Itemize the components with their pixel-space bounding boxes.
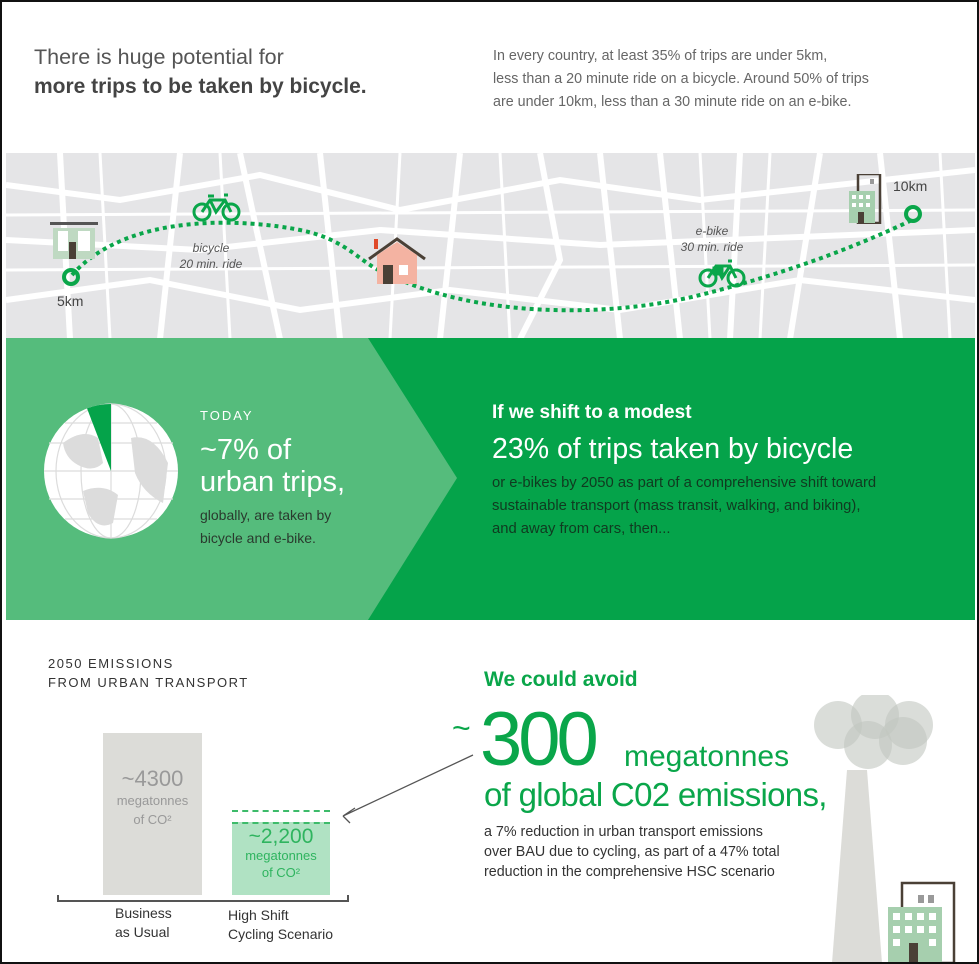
icon: globe with pie wedge — [44, 403, 178, 539]
intro text — [493, 48, 869, 110]
bar: high shift: ~2,200 — [249, 825, 313, 848]
label: business as usual: Business — [115, 905, 172, 921]
label: 5km: 5km — [57, 293, 83, 309]
text: We could avoid — [484, 668, 638, 691]
bar: high shift — [232, 822, 330, 895]
bar: business as usual: of CO² — [133, 812, 172, 827]
green band — [6, 338, 975, 620]
label: bicycle 20 min ride: 20 min. ride — [180, 257, 242, 271]
title: There is huge potential for — [34, 45, 284, 69]
block: we could avoid — [452, 668, 827, 880]
intro text: In every country, at least 35% of trips are under 5km, — [493, 48, 827, 64]
arrow — [342, 754, 474, 824]
route: dotted path — [70, 220, 911, 312]
bar: business as usual: ~4300 — [122, 766, 183, 791]
chart heading — [48, 656, 249, 690]
bar: high shift: of CO² — [262, 865, 300, 880]
block: today: urban trips, — [200, 466, 345, 498]
icon: e-bike — [698, 260, 746, 288]
block: today: TODAY — [200, 408, 254, 423]
bar: business as usual — [103, 733, 202, 895]
block: shift scenario — [492, 402, 876, 537]
icon: office building — [849, 174, 882, 224]
bar: high shift: megatonnes — [245, 848, 317, 863]
block: today: ~7% of — [200, 434, 291, 466]
title: more trips to be taken by bicycle. — [34, 75, 367, 98]
label: 10km: 10km — [893, 178, 927, 194]
icon: factory with smoke — [814, 695, 956, 962]
label: e-bike 30 min ride — [681, 224, 743, 254]
icon: start marker 5km — [62, 268, 80, 286]
text: 300 — [480, 697, 595, 782]
title — [34, 45, 367, 98]
block: today — [200, 408, 345, 546]
text: a 7% reduction in urban transport emissions — [484, 824, 763, 840]
text: over BAU due to cycling, as part of a 47% total — [484, 844, 780, 860]
block: shift scenario: 23% of trips taken by bicycle — [492, 433, 853, 465]
label: bicycle 20 min ride — [180, 241, 242, 271]
label: business as usual — [115, 905, 172, 940]
text: of global C02 emissions, — [484, 776, 827, 813]
text: ~ — [452, 710, 471, 746]
text: megatonnes — [624, 740, 789, 773]
chart heading: 2050 EMISSIONS — [48, 656, 174, 671]
block: shift scenario: or e-bikes by 2050 as part of a comprehensive shift toward — [492, 475, 876, 491]
label: e-bike 30 min ride: e-bike — [696, 224, 728, 238]
label: high shift: High Shift — [228, 907, 289, 923]
map panel — [6, 153, 975, 338]
icon: bicycle — [192, 194, 240, 222]
block: today: bicycle and e-bike. — [200, 530, 316, 546]
icon: end marker 10km — [904, 205, 922, 223]
bar chart — [57, 733, 349, 942]
label: high shift: Cycling Scenario — [228, 926, 333, 942]
bar: business as usual: megatonnes — [117, 793, 188, 808]
intro text: are under 10km, less than a 30 minute ride on an e-bike. — [493, 94, 851, 110]
block: shift scenario: and away from cars, then... — [492, 521, 670, 537]
label: e-bike 30 min ride: 30 min. ride — [681, 240, 743, 254]
block: today: globally, are taken by — [200, 507, 331, 523]
intro text: less than a 20 minute ride on a bicycle. Around 50% of trips — [493, 71, 869, 87]
icon: shop start — [50, 222, 98, 259]
icon: house — [368, 237, 426, 284]
block: shift scenario: If we shift to a modest — [492, 402, 692, 423]
chart heading: FROM URBAN TRANSPORT — [48, 675, 249, 690]
text: reduction in the comprehensive HSC scenario — [484, 864, 775, 880]
block: shift scenario: sustainable transport (mass transit, walking, and biking), — [492, 498, 860, 514]
label: business as usual: as Usual — [115, 924, 169, 940]
label: high shift — [228, 907, 333, 942]
label: bicycle 20 min ride: bicycle — [193, 241, 229, 255]
